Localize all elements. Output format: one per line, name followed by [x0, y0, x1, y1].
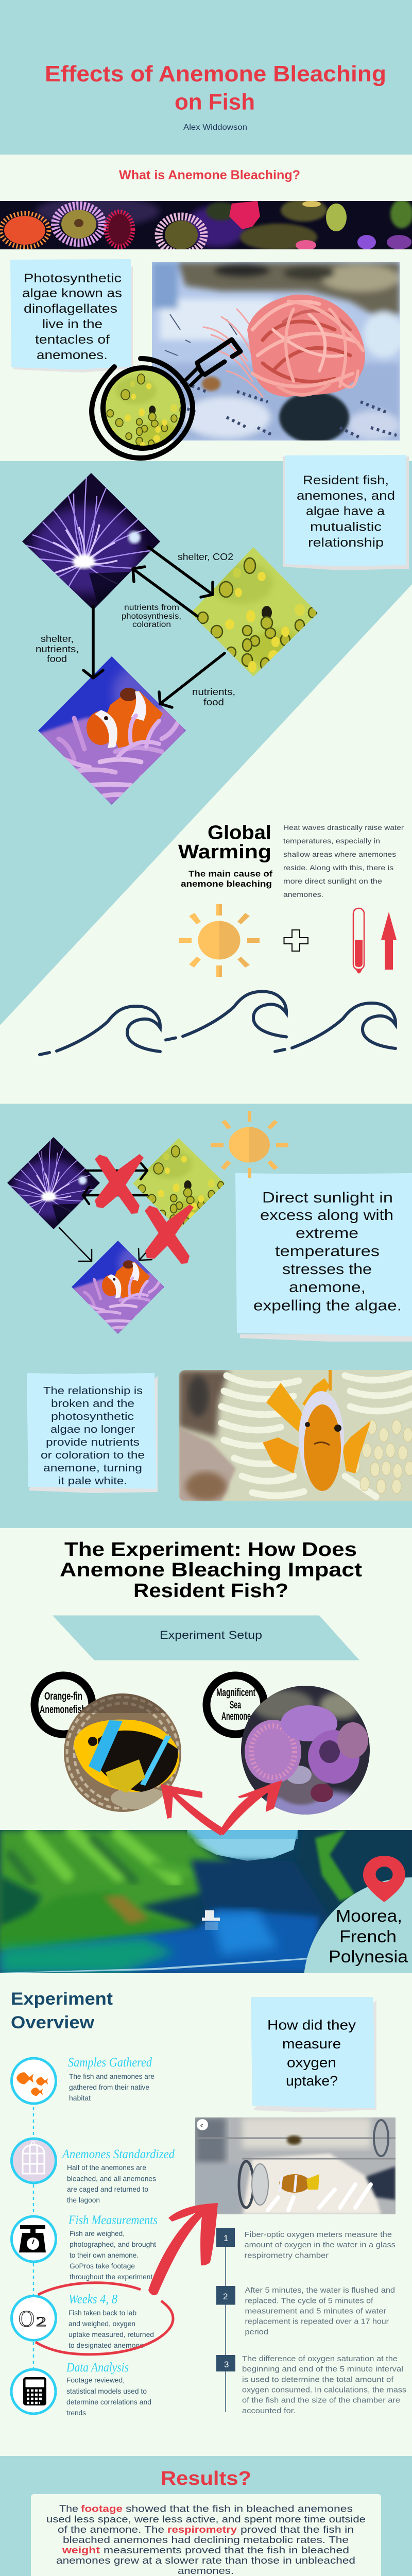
labels: relationship benefits: coloration: [132, 620, 171, 629]
photo: algae diamond: [191, 547, 318, 676]
note: direct sunlight: Direct sunlight in: [262, 1190, 393, 1206]
label: magnificent sea anemone: [207, 1675, 264, 1734]
background: diagonal teal section: [0, 461, 412, 1025]
heading: the experiment: The Experiment: How Does: [64, 1539, 357, 1561]
photo: purple anemone diamond: [22, 473, 160, 610]
note: direct sunlight: temperatures: [275, 1243, 380, 1260]
label: orange-fin anemonefish: [35, 1675, 92, 1734]
icon: up arrow: [381, 912, 397, 970]
photo: magnificent sea anemone circle: [239, 1685, 371, 1821]
step: samples gathered: gathered from their native: [69, 2083, 149, 2091]
photo: respirometry chamber: [195, 2117, 396, 2214]
step: weeks 4 and 8: Weeks 4, 8: [68, 2293, 117, 2306]
label: magnificent sea anemone: Anemone: [221, 1710, 251, 1722]
note: how did they measure oxygen uptake: How did they: [267, 2018, 356, 2033]
heading: the experiment: Anemone Bleaching Impact: [60, 1559, 362, 1581]
step: weeks 4 and 8: O: [19, 2306, 35, 2331]
note: how did they measure oxygen uptake: measure: [282, 2036, 341, 2052]
step: data analysis: Data Analysis: [66, 2361, 129, 2375]
panel: results summary: weight: [62, 2545, 100, 2555]
step 2: period: [245, 2328, 268, 2336]
note: direct sunlight: stresses the: [282, 1261, 372, 1278]
step 3: The difference of oxygen saturation at the: [242, 2355, 398, 2363]
panel: results summary: footage: [81, 2504, 123, 2514]
text: heat waves explanation: shallow areas where anemones: [283, 850, 396, 858]
step: data analysis: determine correlations and: [66, 2398, 151, 2406]
step: samples gathered: habitat: [69, 2094, 91, 2102]
note: mutualistic relationship: [283, 455, 409, 570]
arrow: algae to fish: [159, 653, 225, 707]
text: heat waves explanation: Heat waves drastically raise water: [283, 823, 404, 832]
photo: orange-fin anemonefish circle: [62, 1692, 183, 1814]
step 2: [216, 2286, 395, 2336]
step 1: amount of oxygen in the water in a glass: [244, 2241, 396, 2249]
background: teal results section: [0, 2456, 412, 2576]
step: data analysis: trends: [66, 2409, 86, 2417]
panel: results summary: respirometry: [167, 2524, 237, 2535]
step: fish measurements: to their own anemone.: [70, 2251, 139, 2259]
note: photosynthetic algae: anemones.: [37, 348, 108, 362]
note: direct sunlight: [235, 1173, 412, 1342]
text: moorea french polynesia: [329, 1906, 408, 1966]
step: weeks 4 and 8: to designated anemone: [68, 2341, 144, 2349]
title: on Fish: [175, 90, 255, 114]
arrows: thin arrows to fish: [59, 1228, 152, 1261]
step: data analysis: Footage reviewed,: [66, 2376, 125, 2384]
labels: relationship benefits: food: [203, 697, 224, 707]
callout: red circle around weeks step: [36, 2283, 173, 2354]
note: relationship broken: broken and the: [51, 1398, 134, 1410]
text: moorea french polynesia: French: [339, 1927, 397, 1946]
note: direct sunlight: expelling the algae.: [253, 1297, 402, 1314]
photo: small algae diamond: [133, 1138, 225, 1231]
text: heat waves explanation: reside. Along with this, there is: [283, 863, 393, 872]
icon: sun: [179, 904, 260, 977]
step 2: 2: [223, 2292, 228, 2301]
step: weeks 4 and 8: and weighed, oxygen: [68, 2319, 135, 2328]
step 1: 1: [224, 2233, 228, 2243]
step: anemones standardized: Anemones Standardized: [61, 2147, 175, 2161]
step 3: oxygen consumed. In calculations, the mass: [242, 2386, 406, 2395]
panel: results summary: anemones.: [178, 2566, 234, 2576]
labels: relationship benefits: nutrients from: [124, 603, 179, 612]
labels: relationship benefits: [36, 552, 235, 707]
step 3: accounted for.: [242, 2407, 296, 2415]
heading: results: Results?: [161, 2468, 251, 2489]
note: photosynthetic algae: tentacles of: [35, 333, 110, 347]
icon: thermometer: [353, 908, 364, 974]
icon: red x lower: [145, 1205, 194, 1264]
step: samples gathered: Samples Gathered: [68, 2056, 152, 2070]
banner: experiment setup: [53, 1616, 359, 1660]
note: photosynthetic algae: Photosynthetic: [24, 272, 122, 285]
step: fish measurements: GoPros take footage: [70, 2262, 135, 2270]
note: direct sunlight: excess along with: [260, 1207, 393, 1224]
step 2: measurement and 5 minutes of water: [245, 2308, 386, 2316]
photo: pink anemone on sand: [152, 262, 404, 443]
step 1: [216, 2228, 396, 2260]
step: fish measurements: Fish are weighed,: [70, 2229, 125, 2238]
heading: global warming: Global: [208, 822, 271, 844]
note: how did they measure oxygen uptake: uptake?: [286, 2073, 338, 2089]
step: samples gathered: [11, 2056, 154, 2104]
photo: clownfish diamond: [38, 656, 186, 805]
step: weeks 4 and 8: uptake measured, returned: [68, 2330, 154, 2338]
step 1: Fiber-optic oxygen meters measure the: [244, 2231, 392, 2239]
panel: results summary: bleached anemones had declining metabolic rates. The: [63, 2535, 349, 2545]
note: mutualistic relationship: mutualistic: [310, 520, 382, 534]
label: magnificent sea anemone: Magnificent: [216, 1687, 255, 1699]
step: anemones standardized: bleached, and all anemones: [67, 2174, 156, 2182]
label: orange-fin anemonefish: Orange-fin: [44, 1690, 82, 1702]
labels: relationship benefits: shelter,: [41, 634, 74, 644]
heading: global warming: Warming: [178, 841, 271, 863]
labels: relationship benefits: nutrients,: [192, 687, 235, 697]
diagram: broken relationship: [7, 1137, 225, 1334]
arrow: anemone to fish: [83, 606, 103, 678]
text: moorea french polynesia: Moorea,: [336, 1906, 402, 1925]
note: relationship broken: it pale white.: [58, 1476, 127, 1487]
arrows: between anemone and algae: [83, 1163, 147, 1204]
icon: location pin: [363, 1856, 405, 1902]
step 3: of the fish and the size of the chamber are: [242, 2397, 400, 2405]
diagram: anemone algae fish relationships: [22, 473, 318, 805]
note: relationship broken: The relationship is: [43, 1385, 143, 1397]
step: anemones standardized: are caged and returned to: [67, 2185, 148, 2193]
timeline: experiment steps: [11, 2056, 175, 2417]
step: anemones standardized: [11, 2139, 175, 2204]
icon: magnifying glass over algae: [92, 340, 241, 458]
photo: small clownfish diamond: [72, 1241, 164, 1334]
note: relationship broken: or coloration to the: [41, 1450, 145, 1461]
note: relationship broken: algae no longer: [50, 1424, 135, 1435]
step: data analysis: [11, 2361, 151, 2417]
heading: experiment overview: Overview: [11, 2013, 95, 2032]
heading: global warming: anemone bleaching: [181, 879, 272, 889]
note: mutualistic relationship: relationship: [308, 536, 384, 550]
step 1: respirometry chamber: [244, 2251, 329, 2260]
heading: global warming: [178, 822, 272, 889]
panel: results summary: proved that the fish in: [241, 2524, 354, 2535]
background: teal bleaching section: [0, 1104, 412, 1528]
step 3: [216, 2355, 406, 2415]
step: fish measurements: [11, 2213, 158, 2281]
step 2: After 5 minutes, the water is flushed and: [245, 2286, 395, 2295]
heading: global warming: The main cause of: [188, 869, 272, 879]
banner: experiment setup: Experiment Setup: [160, 1629, 262, 1641]
text: heat waves explanation: anemones.: [283, 890, 323, 899]
panel: results summary: showed that the fish in bleached anemones: [126, 2504, 353, 2514]
step 2: replacement is repeated over a 17 hour: [245, 2318, 389, 2326]
author: Alex Widdowson: [183, 123, 247, 132]
heading: the experiment: [60, 1539, 362, 1602]
note: mutualistic relationship: anemones, and: [297, 489, 395, 503]
labels: relationship benefits: shelter, CO2: [178, 552, 233, 562]
note: relationship broken: anemone, turning: [43, 1463, 142, 1474]
heading: what is anemone bleaching: What is Anemone Bleaching?: [119, 168, 300, 182]
photo: respirometry chamber: e: [200, 2121, 203, 2128]
icon: red x upper: [95, 1154, 144, 1214]
note: relationship broken: [27, 1373, 158, 1493]
step 3: beginning and end of the 5 minute interval: [242, 2365, 403, 2374]
note: photosynthetic algae: live in the: [42, 317, 102, 331]
icon: sun over note: [211, 1111, 288, 1178]
title: [45, 61, 386, 114]
panel: results summary: anemones grew at a slower rate than those in unbleached: [56, 2555, 355, 2566]
panel: results summary: [31, 2494, 381, 2576]
step: data analysis: statistical models used to: [66, 2387, 147, 2395]
step: anemones standardized: Half of the anemones are: [67, 2163, 146, 2172]
photo: moorea landscape: [0, 1830, 412, 1973]
note: photosynthetic algae: algae known as: [22, 286, 122, 300]
arrow: algae to anemone: [133, 567, 197, 616]
panel: results summary: The: [59, 2504, 78, 2514]
step 3: 3: [224, 2360, 229, 2369]
labels: relationship benefits: photosynthesis,: [122, 612, 181, 621]
note: direct sunlight: anemone,: [289, 1279, 366, 1296]
text: heat waves explanation: more direct sunlight on the: [283, 877, 382, 885]
panel: results summary: measurements proved that the fish in bleached: [104, 2545, 349, 2555]
note: mutualistic relationship: Resident fish,: [303, 473, 389, 487]
list: oxygen measurement steps: [216, 2228, 406, 2415]
arrow: red double arrow to species: [161, 1780, 282, 1836]
step: fish measurements: photographed, and brought: [70, 2240, 156, 2248]
arrow: red arrow to respirometry photo: [148, 2203, 218, 2295]
step: weeks 4 and 8: 2: [36, 2314, 46, 2329]
labels: relationship benefits: nutrients,: [36, 644, 79, 654]
text: heat waves explanation: [283, 823, 404, 899]
note: relationship broken: provide nutrients: [46, 1437, 140, 1448]
arrow: anemone to algae: [148, 547, 213, 597]
icon: waves: [40, 991, 396, 1055]
title: Effects of Anemone Bleaching: [45, 61, 386, 87]
note: photosynthetic algae: dinoflagellates: [24, 302, 117, 316]
step: samples gathered: The fish and anemones are: [69, 2072, 154, 2080]
labels: relationship benefits: food: [47, 654, 67, 664]
step: fish measurements: throughout the experiment.: [70, 2273, 154, 2281]
note: mutualistic relationship: algae have a: [306, 504, 385, 518]
photo: anemone banner: [0, 201, 412, 249]
note: direct sunlight: extreme: [296, 1225, 358, 1242]
note: relationship broken: photosynthetic: [51, 1411, 134, 1422]
photo: clownfish in bleached anemone: [179, 1370, 412, 1501]
heading: experiment overview: Experiment: [11, 1989, 113, 2009]
step 3: is used to determine the total amount of: [242, 2376, 394, 2384]
step: anemones standardized: the lagoon: [67, 2196, 100, 2204]
step: weeks 4 and 8: [11, 2293, 154, 2349]
label: magnificent sea anemone: Sea: [230, 1699, 241, 1711]
heading: the experiment: Resident Fish?: [133, 1580, 288, 1602]
background: title band: [0, 0, 412, 155]
text: moorea french polynesia: Polynesia: [329, 1947, 408, 1966]
label: orange-fin anemonefish: Anemonefish: [40, 1704, 86, 1716]
note: how did they measure oxygen uptake: oxygen: [287, 2055, 336, 2070]
note: how did they measure oxygen uptake: [251, 1997, 376, 2112]
heading: experiment overview: [11, 1989, 113, 2032]
panel: results summary: used less space, were less active, and spent more time outside: [46, 2514, 366, 2524]
photo: small anemone diamond: [7, 1137, 100, 1229]
step 2: replaced. The cycle of 5 minutes of: [245, 2297, 374, 2305]
icon: plus sign: [284, 930, 308, 951]
step: fish measurements: Fish Measurements: [68, 2213, 158, 2227]
note: photosynthetic algae: [10, 259, 133, 372]
step: weeks 4 and 8: Fish taken back to lab: [68, 2309, 136, 2317]
panel: results summary: of the anemone. The: [58, 2524, 164, 2535]
text: heat waves explanation: temperatures, especially in: [283, 837, 380, 845]
